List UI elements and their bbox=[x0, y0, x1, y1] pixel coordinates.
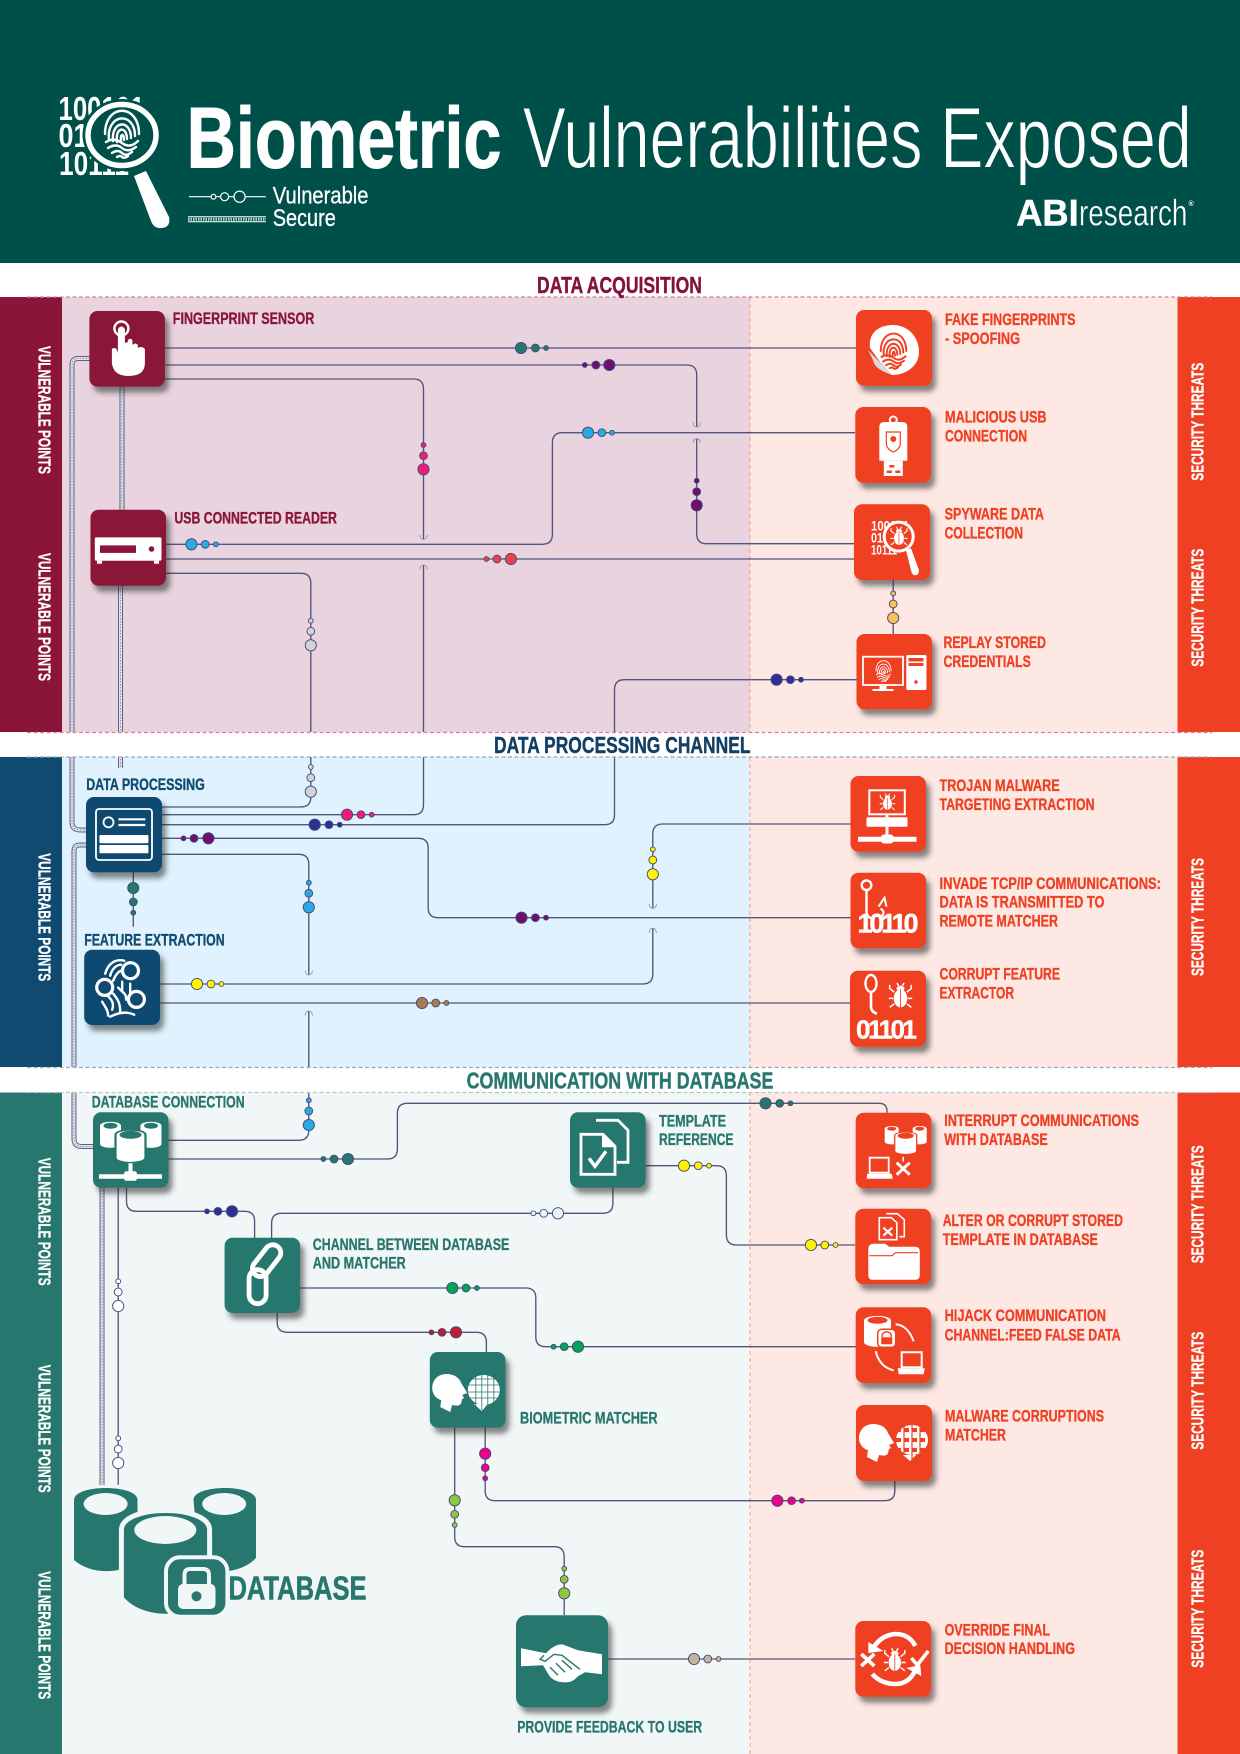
label: override final decision handling: OVERRIDE FINAL bbox=[945, 1620, 1050, 1639]
logo: magnifier over binary and fingerprint bbox=[58, 90, 169, 228]
icon: fake fingerprints bbox=[856, 310, 932, 386]
section band: communication with database: COMMUNICATION WITH DATABASE bbox=[467, 1068, 773, 1094]
right rotated labels: security threats bbox=[1187, 363, 1207, 1668]
legend: vulnerable and secure: Vulnerable bbox=[273, 182, 368, 209]
section band: data acquisition: DATA ACQUISITION bbox=[537, 272, 702, 298]
left rotated labels: vulnerable points: VULNERABLE POINTS bbox=[34, 853, 54, 981]
connector: channel to biometric matcher bbox=[277, 1313, 486, 1352]
panel: data acquisition vulnerable points bbox=[0, 297, 750, 732]
label: malware corruptions matcher: MALWARE CORRUPTIONS bbox=[945, 1406, 1104, 1425]
label: spyware data collection: COLLECTION bbox=[945, 523, 1023, 542]
connector: database connection to database bbox=[113, 1187, 124, 1485]
label: database connection: DATABASE CONNECTION bbox=[92, 1092, 245, 1111]
connector: feature extraction to trojan malware bbox=[160, 824, 850, 990]
panel: database security threats bbox=[750, 1092, 1240, 1754]
icon: invade tcp/ip bbox=[850, 873, 926, 948]
label: channel between database and matcher bbox=[313, 1235, 509, 1273]
label: fake fingerprints spoofing bbox=[945, 310, 1076, 348]
icon: interrupt communications bbox=[856, 1113, 931, 1188]
label: interrupt communications with database bbox=[944, 1111, 1139, 1149]
icon: spyware data collection bbox=[854, 504, 930, 580]
icon: corrupt feature extractor bbox=[850, 971, 926, 1047]
panel: database vulnerable points bbox=[0, 1092, 750, 1754]
panel: data processing vulnerable points bbox=[0, 757, 750, 1067]
label: alter or corrupt stored template: TEMPLATE IN DATABASE bbox=[943, 1230, 1098, 1249]
connector: spyware to replay credentials bbox=[888, 580, 899, 634]
section band: data acquisition bbox=[0, 263, 1240, 298]
connector: data processing to invade tcp/ip bbox=[162, 833, 850, 923]
label: malicious usb connection: MALICIOUS USB bbox=[945, 408, 1047, 427]
label: malicious usb connection bbox=[945, 408, 1047, 446]
logo: magnifier over binary and fingerprint: 01 bbox=[58, 117, 88, 154]
connector: usb reader to spyware bbox=[166, 553, 854, 565]
label: malware corruptions matcher bbox=[945, 1406, 1104, 1444]
connector: feedback to override decision bbox=[607, 1653, 855, 1665]
left rotated labels: vulnerable points: VULNERABLE POINTS bbox=[34, 1158, 54, 1286]
label: invade tcp/ip communications bbox=[940, 874, 1161, 930]
label: hijack communication channel bbox=[945, 1306, 1121, 1344]
label: invade tcp/ip communications: DATA IS TRANSMITTED TO bbox=[940, 893, 1104, 912]
panel: data acquisition security threats bbox=[750, 297, 1240, 732]
label: corrupt feature extractor bbox=[940, 964, 1060, 1002]
label: corrupt feature extractor: CORRUPT FEATURE bbox=[940, 964, 1060, 983]
connector: channel to hijack communication bbox=[300, 1282, 856, 1352]
connector: replay credentials to data processing bbox=[162, 674, 856, 830]
icon: trojan malware bbox=[850, 776, 926, 852]
section band: data processing channel: DATA PROCESSING CHANNEL bbox=[494, 732, 750, 758]
label: replay stored credentials: REPLAY STORED bbox=[944, 633, 1046, 652]
left rotated labels: vulnerable points: VULNERABLE POINTS bbox=[34, 346, 54, 474]
label: database: DATABASE bbox=[228, 1570, 366, 1607]
left rotated labels: vulnerable points bbox=[34, 346, 54, 1699]
icon: database connection bbox=[93, 1112, 168, 1188]
icon: secure database with lock bbox=[74, 1488, 256, 1617]
icon: override decision handling bbox=[855, 1621, 931, 1697]
icon: provide feedback handshake bbox=[516, 1615, 608, 1707]
secure rails bbox=[72, 358, 122, 1485]
label: hijack communication channel: CHANNEL:FEED FALSE DATA bbox=[945, 1325, 1121, 1344]
label: spyware data collection bbox=[945, 504, 1044, 542]
icon: biometric matcher bbox=[430, 1352, 506, 1428]
brand: ABI research: ABI bbox=[1016, 193, 1079, 234]
brand: ABI research bbox=[1016, 193, 1194, 234]
right rotated labels: security threats: SECURITY THREATS bbox=[1187, 1332, 1207, 1450]
connector: template reference to alter template bbox=[645, 1160, 855, 1251]
icon: channel link bbox=[225, 1238, 300, 1313]
label: malware corruptions matcher: MATCHER bbox=[945, 1425, 1006, 1444]
title: Biometric bbox=[187, 91, 501, 187]
logo: magnifier over binary and fingerprint: 10111 bbox=[59, 145, 129, 182]
right rotated labels: security threats: SECURITY THREATS bbox=[1187, 1550, 1207, 1668]
label: invade tcp/ip communications: INVADE TCP/IP COMMUNICATIONS: bbox=[940, 874, 1161, 893]
connector: database connection to channel bbox=[126, 1187, 255, 1238]
label: fingerprint sensor: FINGERPRINT SENSOR bbox=[173, 309, 314, 328]
label: template reference bbox=[659, 1111, 734, 1149]
label: feature extraction: FEATURE EXTRACTION bbox=[84, 931, 225, 950]
connector: fingerprint sensor to data processing bbox=[162, 379, 429, 820]
label: trojan malware targeting extraction bbox=[940, 776, 1094, 814]
icon: feature extraction bbox=[84, 950, 160, 1025]
label: invade tcp/ip communications: REMOTE MATCHER bbox=[940, 911, 1058, 930]
section band: data processing channel bbox=[0, 732, 1240, 758]
icon: malware corruptions matcher bbox=[856, 1405, 932, 1481]
label: replay stored credentials bbox=[944, 633, 1046, 671]
label: template reference: TEMPLATE bbox=[659, 1111, 726, 1130]
label: data processing: DATA PROCESSING bbox=[86, 775, 205, 794]
right rotated labels: security threats: SECURITY THREATS bbox=[1187, 858, 1207, 976]
icon: hijack communication bbox=[856, 1307, 931, 1383]
label: fake fingerprints spoofing: FAKE FINGERPRINTS bbox=[945, 310, 1076, 329]
left rotated labels: vulnerable points: VULNERABLE POINTS bbox=[34, 1365, 54, 1493]
logo: magnifier over binary and fingerprint: 100101 bbox=[58, 90, 144, 127]
label: spyware data collection: SPYWARE DATA bbox=[945, 504, 1044, 523]
icon: malicious usb bbox=[855, 407, 931, 483]
icon: spyware data collection: 10111 bbox=[871, 541, 897, 557]
label: biometric matcher: BIOMETRIC MATCHER bbox=[520, 1409, 658, 1428]
label: malicious usb connection: CONNECTION bbox=[945, 427, 1027, 446]
title bbox=[187, 91, 1192, 187]
legend: vulnerable and secure bbox=[188, 182, 368, 232]
connector: usb reader to data processing bbox=[162, 573, 316, 807]
label: channel between database and matcher: CHANNEL BETWEEN DATABASE bbox=[313, 1235, 509, 1254]
label: alter or corrupt stored template: ALTER OR CORRUPT STORED bbox=[943, 1211, 1123, 1230]
left rotated labels: vulnerable points: VULNERABLE POINTS bbox=[34, 553, 54, 681]
icon: template reference bbox=[570, 1112, 646, 1188]
icon: usb reader bbox=[90, 510, 166, 586]
icon: invade tcp/ip: 10110 bbox=[858, 909, 918, 939]
legend: vulnerable and secure: Secure bbox=[273, 205, 336, 232]
label: interrupt communications with database: WITH DATABASE bbox=[944, 1130, 1048, 1149]
right rotated labels: security threats: SECURITY THREATS bbox=[1187, 1145, 1207, 1263]
icon: replay stored credentials bbox=[856, 634, 932, 709]
connector: data processing to feature extraction bbox=[128, 872, 139, 927]
label: provide feedback to user: PROVIDE FEEDBACK TO USER bbox=[517, 1717, 702, 1736]
label: usb connected reader: USB CONNECTED READER bbox=[174, 508, 337, 527]
connector: feature extraction to corrupt extractor bbox=[160, 997, 850, 1009]
right rotated labels: security threats: SECURITY THREATS bbox=[1187, 363, 1207, 481]
label: template reference: REFERENCE bbox=[659, 1130, 734, 1149]
section band: communication with database bbox=[0, 1067, 1240, 1094]
header banner bbox=[0, 0, 1240, 263]
label: override final decision handling bbox=[945, 1620, 1075, 1658]
icon: alter stored template bbox=[855, 1209, 931, 1284]
label: alter or corrupt stored template bbox=[943, 1211, 1123, 1249]
icon: corrupt feature extractor: 01101 bbox=[856, 1015, 917, 1045]
right rotated labels: security threats: SECURITY THREATS bbox=[1187, 549, 1207, 667]
connector: channel to template reference bbox=[272, 1187, 613, 1238]
brand: ABI research: ® bbox=[1188, 200, 1194, 208]
label: override final decision handling: DECISION HANDLING bbox=[945, 1639, 1075, 1658]
connector: matcher to feedback bbox=[449, 1427, 570, 1615]
label: hijack communication channel: HIJACK COMMUNICATION bbox=[945, 1306, 1106, 1325]
connector: matcher to malware corruptions bbox=[480, 1427, 895, 1506]
icon: spyware data collection: 01 bbox=[871, 529, 883, 545]
connector: usb reader to malicious usb bbox=[166, 427, 855, 550]
label: trojan malware targeting extraction: TARGETING EXTRACTION bbox=[940, 795, 1094, 814]
icon: fingerprint sensor bbox=[89, 311, 165, 387]
label: fake fingerprints spoofing: - SPOOFING bbox=[945, 329, 1020, 348]
label: replay stored credentials: CREDENTIALS bbox=[944, 652, 1031, 671]
label: corrupt feature extractor: EXTRACTOR bbox=[940, 983, 1014, 1002]
icon: data processing bbox=[86, 797, 162, 872]
icon: spyware data collection: 100101 bbox=[871, 517, 909, 533]
label: channel between database and matcher: AND MATCHER bbox=[313, 1254, 406, 1273]
label: interrupt communications with database: INTERRUPT COMMUNICATIONS bbox=[944, 1111, 1139, 1130]
connector: data processing to database connection bbox=[162, 854, 314, 1140]
panel: data processing security threats bbox=[750, 757, 1240, 1067]
label: trojan malware targeting extraction: TROJAN MALWARE bbox=[940, 776, 1060, 795]
connector: fingerprint sensor to fake fingerprints bbox=[164, 342, 856, 354]
connector: database connection to interrupt communications bbox=[168, 1098, 887, 1165]
connector: fingerprint sensor to spyware bbox=[164, 359, 854, 544]
brand: ABI research: research bbox=[1079, 193, 1187, 234]
